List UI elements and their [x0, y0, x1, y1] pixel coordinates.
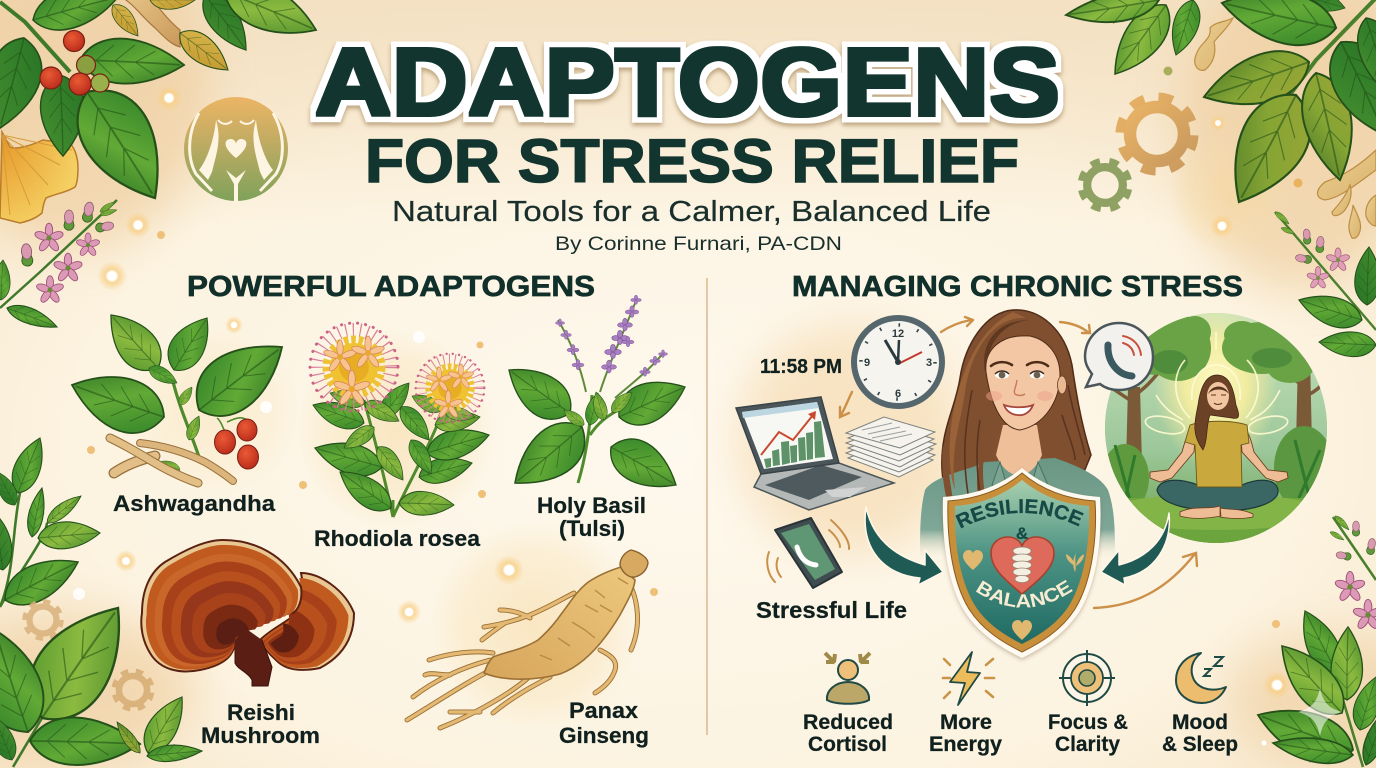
trees — [1126, 357, 1312, 454]
berries — [40, 30, 109, 95]
shield text: & — [1016, 524, 1028, 543]
flower heads — [310, 323, 398, 411]
shield: resilience and balance: BALANCE — [976, 580, 1073, 608]
icon: phone — [767, 518, 849, 588]
ginkgo leaf — [0, 132, 78, 223]
gear bottom-left — [111, 668, 155, 712]
shrubs and ground — [1108, 444, 1149, 506]
benefit: more energy — [929, 652, 1002, 756]
plant: holy basil — [497, 295, 693, 541]
energy lines — [1144, 332, 1289, 437]
benefit: reduced cortisol: Cortisol — [808, 733, 887, 756]
shirt collar — [992, 462, 1048, 490]
stressful life label: Stressful Life — [756, 597, 907, 623]
icon: clock: 9 — [864, 357, 870, 369]
foliage: bottom-left corner — [0, 433, 203, 767]
heading: powerful adaptogens: POWERFUL ADAPTOGENS — [187, 271, 595, 303]
flower spikes — [558, 298, 664, 398]
hair strands and front swoop — [984, 320, 1030, 372]
icon: paper stack — [846, 417, 936, 477]
label: Mushroom — [201, 723, 320, 748]
shield: resilience and balance — [940, 468, 1102, 662]
meditation scene — [1105, 313, 1327, 543]
label: Reishi — [227, 700, 295, 725]
foliage: left flower sprig — [0, 199, 118, 334]
benefit: mood and sleep: Mood — [1172, 711, 1228, 734]
shield text: RESILIENCE — [955, 499, 1084, 528]
label: Holy Basil — [537, 493, 646, 518]
woman with long hair — [920, 310, 1115, 560]
tagline: Natural Tools for a Calmer, Balanced Life — [392, 196, 991, 228]
panel: powerful adaptogens — [63, 295, 693, 748]
subtitle: FOR STRESS RELIEF: FOR STRESS RELIEF — [365, 127, 1019, 195]
berries — [214, 418, 258, 469]
large teal arrows — [865, 507, 1169, 585]
small orange arrows — [840, 317, 1197, 608]
foliage: top-left corner — [0, 0, 325, 223]
label — [559, 698, 649, 748]
foliage: bottom-right corner — [1250, 514, 1376, 768]
plant: ashwagandha — [63, 303, 298, 516]
faint gear bottom-left — [24, 602, 62, 638]
benefit: more energy: More — [940, 711, 992, 734]
time label: 11:58 PM — [760, 356, 842, 378]
benefit: focus and clarity — [1048, 650, 1128, 756]
icon: laptop — [736, 397, 894, 510]
top root — [120, 0, 180, 47]
large orange gear — [1119, 96, 1195, 172]
plant: reishi mushroom — [141, 540, 354, 748]
foliage: right flower sprig — [1273, 210, 1376, 358]
benefit icons row — [803, 650, 1238, 756]
logo: body with heart in circle — [184, 97, 288, 202]
benefit: more energy: Energy — [929, 733, 1002, 756]
heart with spine — [991, 537, 1054, 594]
label: Rhodiola rosea — [314, 526, 481, 551]
label — [537, 493, 646, 541]
gold flower cluster — [1195, 18, 1376, 238]
benefit: mood and sleep — [1162, 653, 1238, 756]
gears: top-right — [1077, 96, 1195, 213]
small hearts and sprig — [963, 550, 1084, 640]
panel: managing chronic stress — [735, 309, 1327, 756]
benefit: mood and sleep: & Sleep — [1162, 733, 1238, 756]
glowing dots — [73, 66, 1302, 746]
title block — [315, 29, 1060, 255]
label — [201, 700, 320, 748]
heading: managing chronic stress: MANAGING CHRONIC STRESS — [792, 271, 1243, 303]
icon: clock: 3 — [926, 357, 932, 369]
roots — [110, 438, 233, 483]
label: Ashwagandha — [113, 491, 276, 516]
benefit: reduced cortisol: Reduced — [803, 711, 893, 734]
plant: rhodiola rosea — [309, 323, 493, 551]
small olive gear — [1077, 157, 1133, 213]
label: Panax — [569, 698, 639, 723]
foliage: top-right corner — [1064, 0, 1376, 238]
benefit: focus and clarity: Clarity — [1055, 733, 1120, 756]
label: (Tulsi) — [559, 516, 625, 541]
icon: clock — [854, 318, 942, 406]
benefit: focus and clarity: Focus & — [1048, 711, 1128, 734]
icon: clock: 12 — [892, 328, 904, 340]
label: Ginseng — [559, 723, 649, 748]
title: ADAPTOGENS: ADAPTOGENS — [315, 29, 1060, 136]
benefit: reduced cortisol — [803, 653, 893, 756]
plant: panax ginseng — [407, 550, 649, 748]
meditating woman — [1150, 432, 1288, 482]
icon: clock: 6 — [895, 388, 901, 400]
byline: By Corinne Furnari, PA-CDN — [555, 233, 842, 255]
icon: phone speech bubble — [1085, 323, 1153, 390]
sparkle mark — [1298, 688, 1342, 736]
